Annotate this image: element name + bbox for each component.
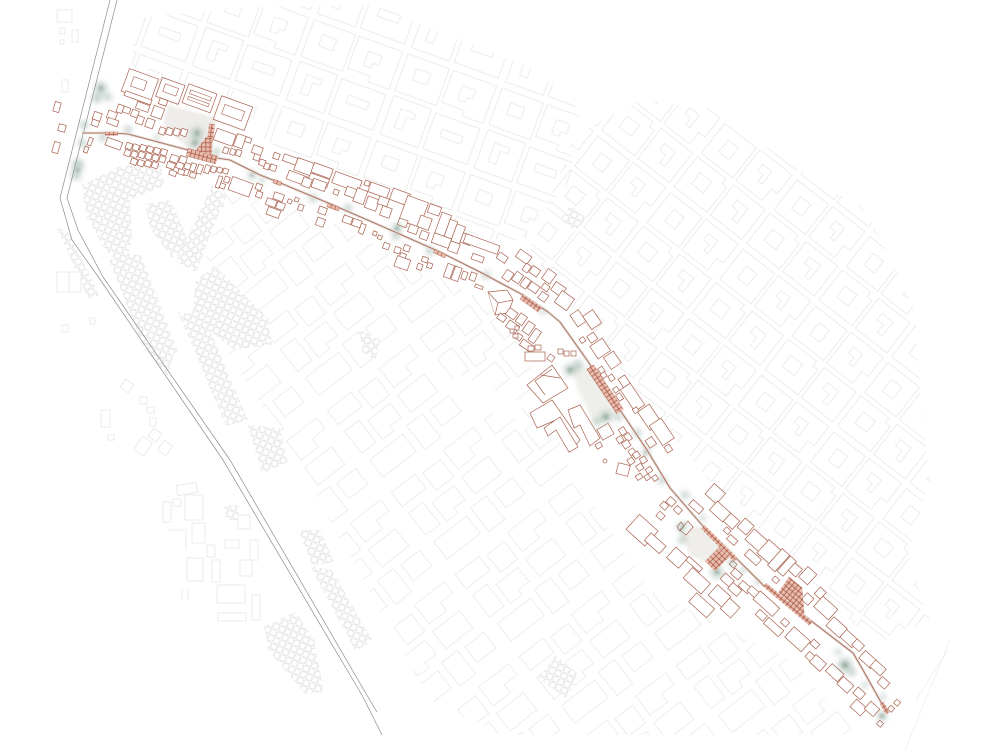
plaza central — [572, 367, 620, 422]
paved grid patches on the street — [105, 124, 890, 715]
faint road lines bottom right — [905, 640, 950, 750]
trees — [71, 82, 887, 721]
large red blocks west of central plaza — [527, 365, 630, 476]
isolated red buildings far west — [52, 101, 66, 154]
plaza west — [163, 105, 217, 150]
faint buildings west of the river line — [57, 10, 260, 621]
informal settlement clusters — [57, 165, 586, 698]
tree crowns — [76, 86, 884, 718]
background building fabric: east district — [530, 100, 930, 642]
main street — [82, 133, 887, 713]
courtyard lines and small red buildings southeast — [677, 521, 901, 727]
red buildings: bend segment — [463, 240, 580, 356]
plaza southeast — [677, 525, 735, 565]
red buildings near the bend, west side — [510, 326, 576, 362]
red buildings: west street segment — [80, 57, 516, 298]
river / highway double line — [60, 0, 382, 735]
background building fabric: north district — [130, 4, 580, 240]
open ground inside the south district — [450, 372, 525, 420]
pentagon building — [488, 290, 513, 315]
courtyards inside west blocks — [131, 70, 245, 126]
red buildings: central street segment — [540, 303, 692, 489]
red buildings: southeast street segment — [618, 459, 919, 745]
background building fabric: south district — [205, 190, 860, 735]
